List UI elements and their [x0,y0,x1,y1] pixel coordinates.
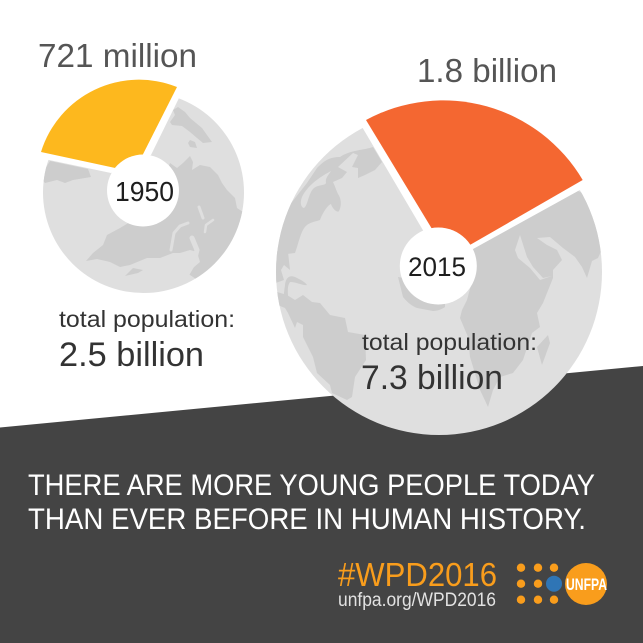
url: unfpa.org/WPD2016 [338,590,496,611]
icon: large globe [276,128,602,435]
hashtag: #WPD2016 [338,556,497,593]
centre circle: 1950: 1950 [115,176,174,207]
icon: small globe [43,98,244,293]
text block: 1950 total population: total population: [59,306,235,332]
gap around orange slice [345,60,620,249]
label: 1.8 billion: 1.8 billion [417,52,557,89]
yellow slice: 721 million [41,80,177,172]
label: 721 million: 721 million [38,37,197,74]
logo wordmark: UNFPA [566,575,607,594]
headline: THERE ARE MORE YOUNG PEOPLE TODAY [28,469,595,502]
text block: 2015 total population: total population: [362,329,537,355]
logo badge [565,563,607,605]
text block: 2015 total population [361,329,537,397]
headline [28,469,595,536]
text block: 1950 total population [59,306,235,374]
dark background band [0,366,643,643]
centre circle: 2015: 2015 [408,252,466,282]
gap around yellow slice [20,60,195,173]
text block: 1950 total population: 2.5 billion [59,336,204,374]
headline: THAN EVER BEFORE IN HUMAN HISTORY. [28,503,586,536]
logo: UNFPA [517,563,607,605]
centre circle: 2015 [400,228,477,304]
panel: 1950 globe chart [41,80,244,293]
panel: 2015 globe chart [276,100,602,435]
orange slice: 1.8 billion [366,100,583,257]
centre circle: 1950 [107,154,179,226]
icon: UN emblem [546,576,562,592]
logo dots [517,564,558,604]
text block: 2015 total population: 7.3 billion [361,359,503,397]
